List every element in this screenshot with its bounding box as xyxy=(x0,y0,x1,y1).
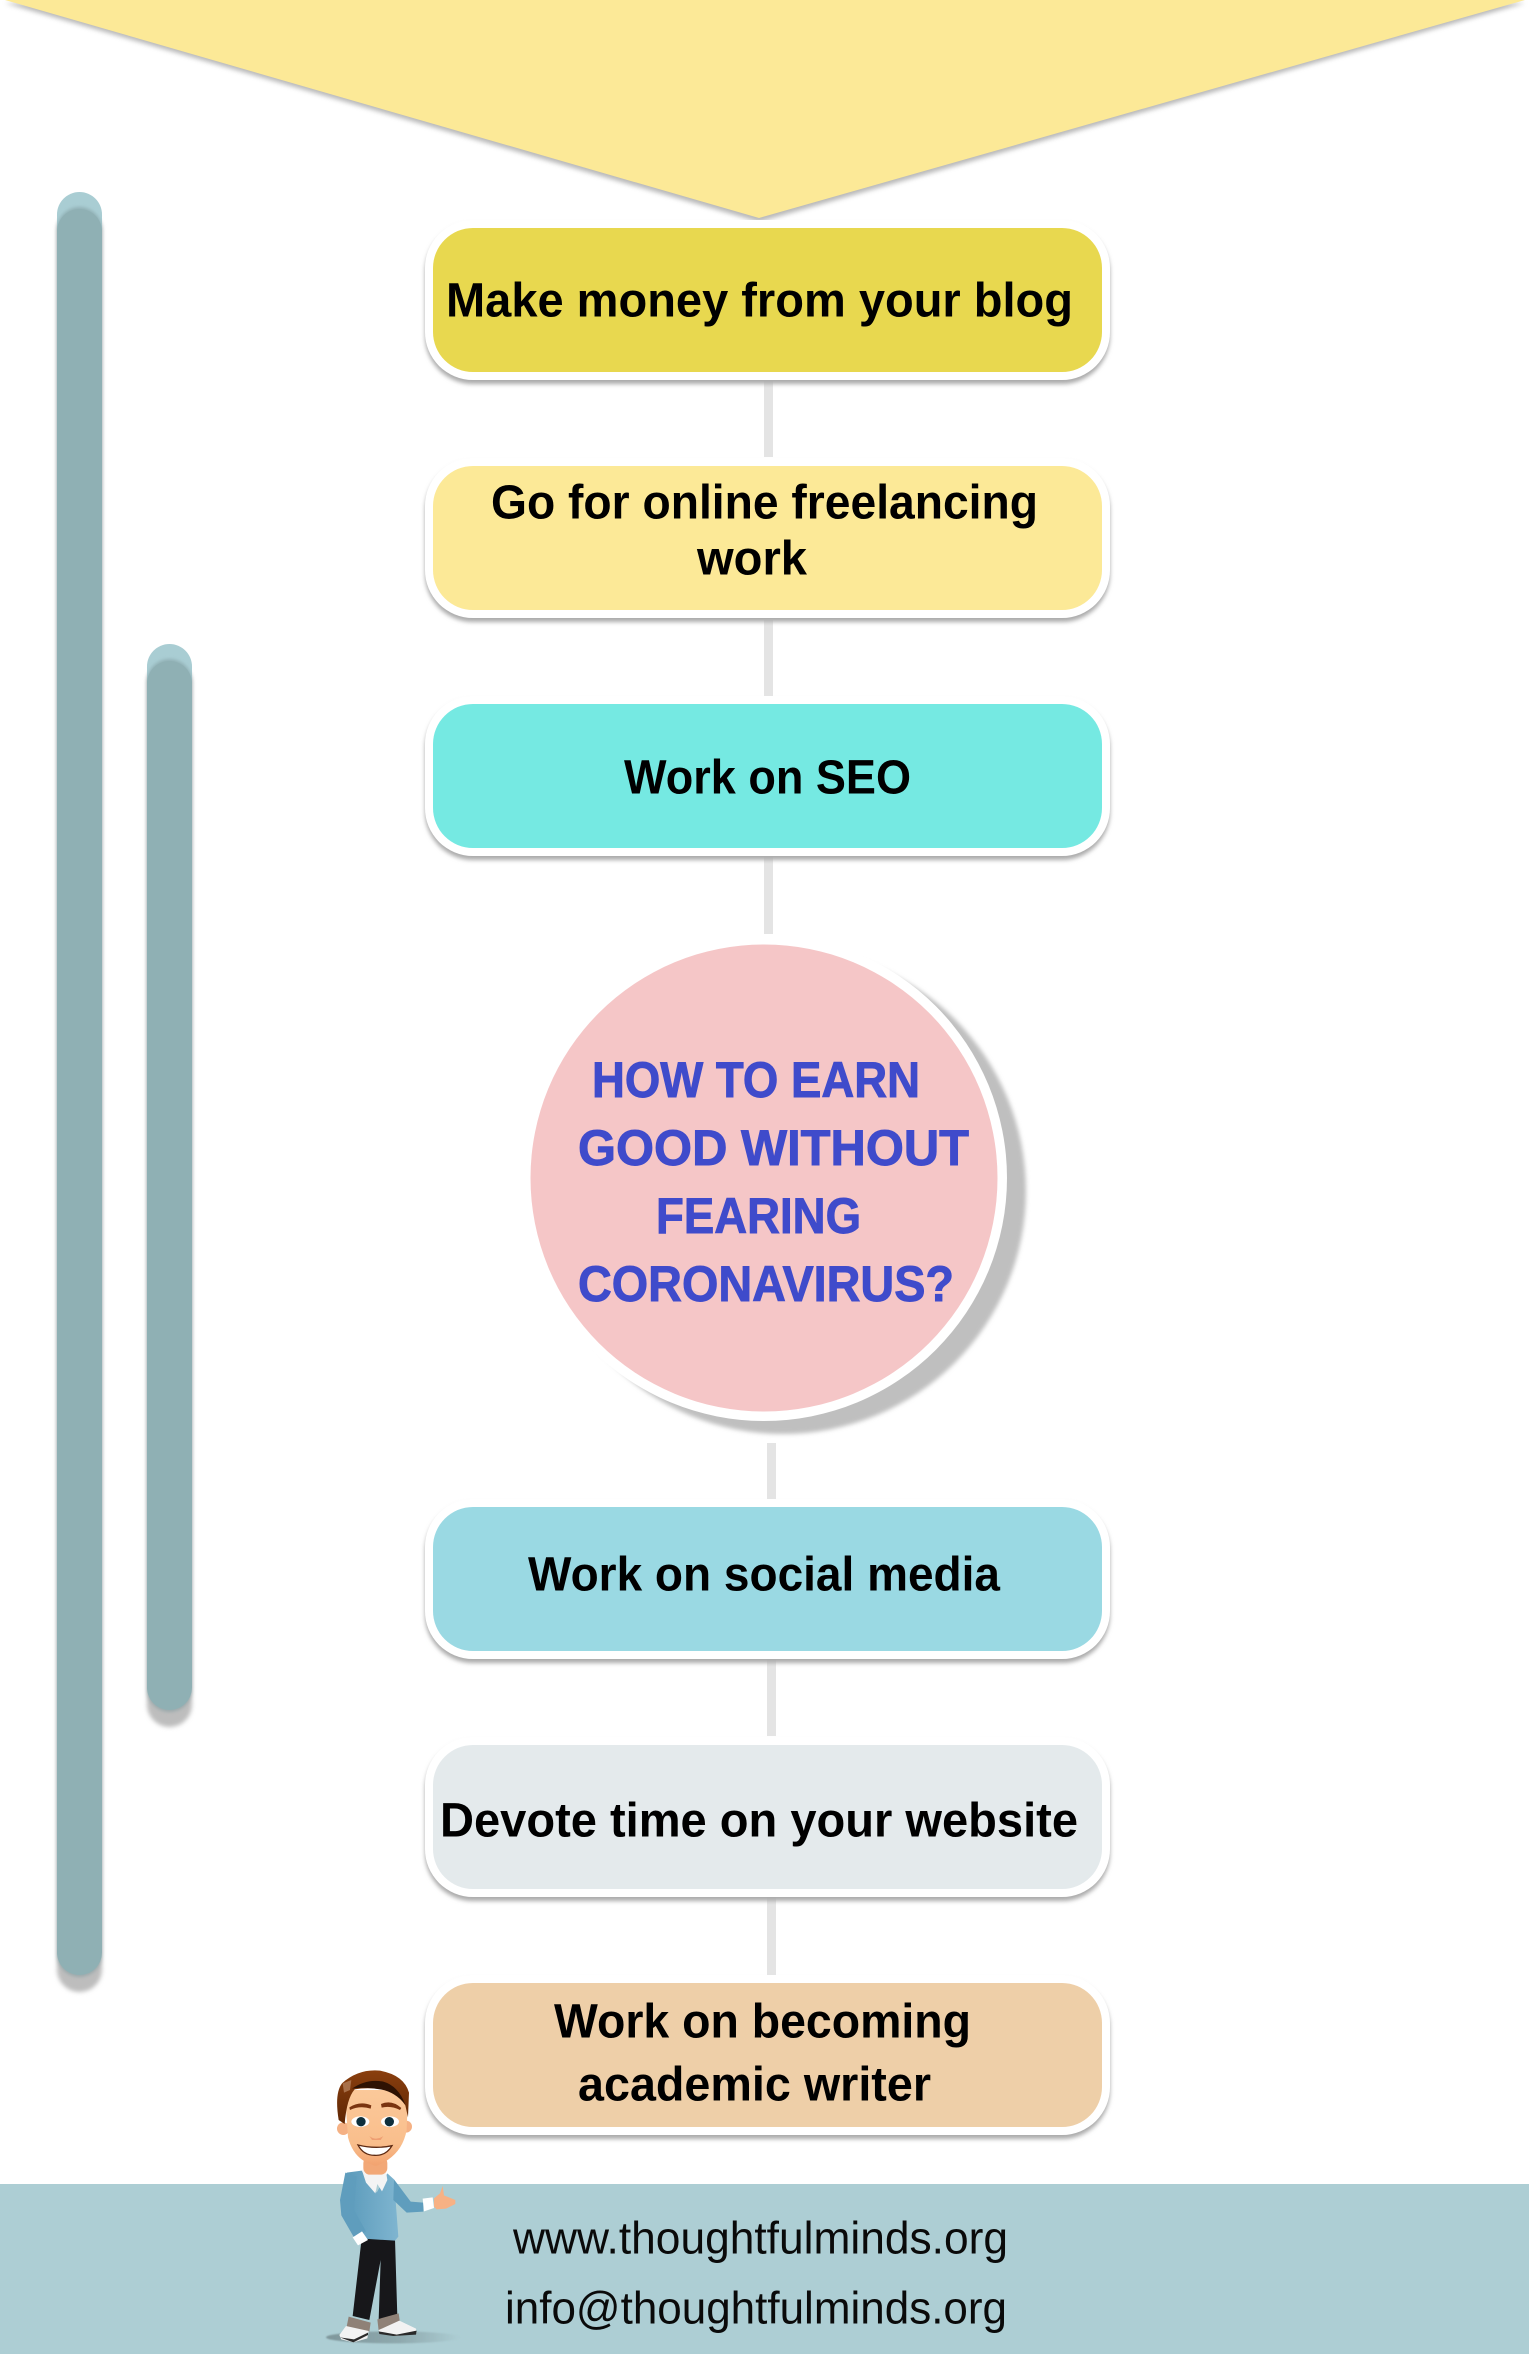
top banner: yellow downward arrow xyxy=(5,0,1525,222)
box: work on social media xyxy=(425,1499,1110,1663)
box: work on becoming academic writer xyxy=(425,1975,1110,2139)
left short vertical bar xyxy=(147,644,192,1727)
box: devote time on your website: Devote time on your website xyxy=(440,1794,1078,1848)
left long vertical bar xyxy=(57,192,102,1992)
box: work on social media: Work on social media xyxy=(528,1548,1000,1602)
box: make money from your blog: Make money from your blog xyxy=(446,274,1073,328)
central circle: main title: CORONAVIRUS? xyxy=(578,1256,954,1312)
connector lines between boxes xyxy=(764,381,776,1975)
central circle: main title: FEARING xyxy=(656,1188,861,1244)
box: make money from your blog xyxy=(425,220,1110,384)
box: devote time on your website xyxy=(425,1737,1110,1901)
box: go for online freelancing work: Go for online freelancing xyxy=(491,476,1038,530)
central circle: main title: HOW TO EARN xyxy=(592,1052,920,1108)
box: go for online freelancing work: work xyxy=(696,532,807,586)
box: work on SEO: Work on SEO xyxy=(624,752,911,804)
box: work on SEO xyxy=(425,696,1110,860)
central circle: main title: GOOD WITHOUT xyxy=(578,1120,969,1176)
footer band xyxy=(0,2184,1529,2354)
box: work on becoming academic writer: academic writer xyxy=(578,2058,931,2112)
icon: cartoon man presenting xyxy=(326,2070,461,2343)
central circle: main title xyxy=(521,935,1026,1434)
footer website: www.thoughtfulminds.org xyxy=(512,2212,1008,2264)
box: go for online freelancing work xyxy=(425,458,1110,622)
box: work on becoming academic writer: Work on becoming xyxy=(554,1996,971,2048)
footer email: info@thoughtfulminds.org xyxy=(505,2282,1007,2334)
